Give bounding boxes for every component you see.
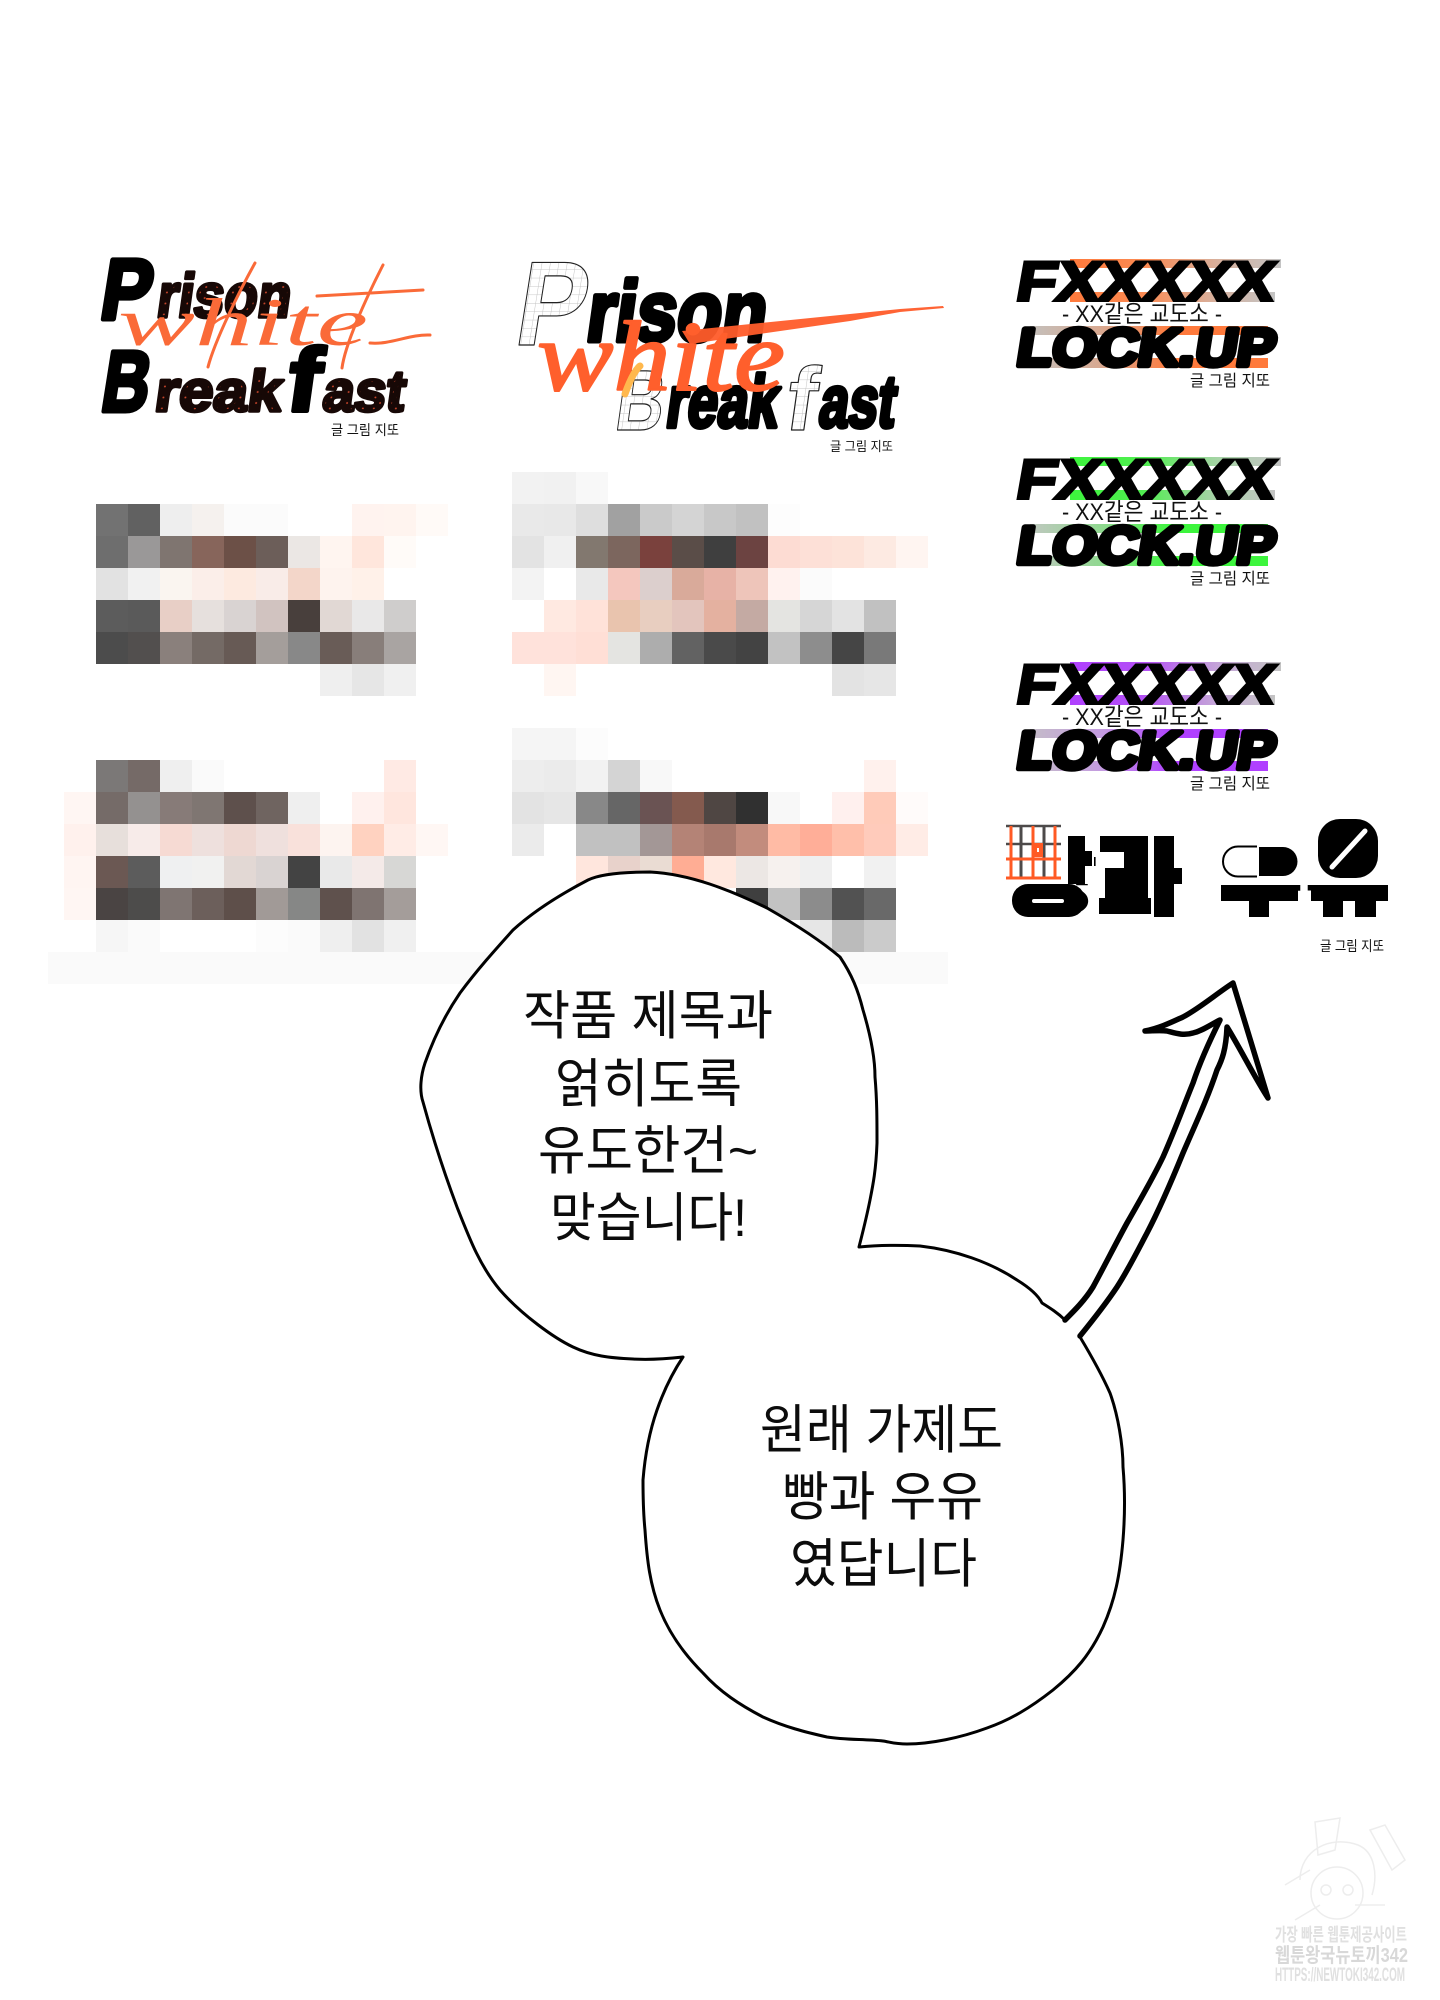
- bubble text: upper balloon: 유도한건~: [538, 1122, 758, 1181]
- logo: FXXXXX LOCK.UP green: LOCK.UP: [1013, 517, 1280, 575]
- logo: FXXXXX LOCK.UP orange: LOCK.UP: [1013, 319, 1280, 377]
- mosaic: faint strip under the logos: [48, 952, 948, 984]
- logo: Prison white Breakfast, version 2: f: [780, 349, 825, 450]
- logo: FXXXXX LOCK.UP orange: 글 그림 지또: [1190, 372, 1270, 390]
- logo: Prison white Breakfast, version 1: ast: [319, 359, 410, 424]
- logo: Prison white Breakfast, version 1: f: [281, 330, 329, 431]
- logo: Prison white Breakfast, version 2: ast: [815, 360, 902, 443]
- mosaic: censored logo lower middle: [512, 728, 928, 952]
- logo: FXXXXX LOCK.UP orange: FXXXXX: [1012, 250, 1281, 312]
- logo: FXXXXX LOCK.UP orange: [1012, 250, 1281, 390]
- logo: Prison white Breakfast, version 2: reak: [662, 360, 786, 443]
- logo: Prison white Breakfast, version 2: rison: [581, 264, 775, 360]
- watermark: site text: [1275, 1925, 1408, 1986]
- logo: Prison white Breakfast, version 2: white: [537, 301, 785, 412]
- bubble text: lower balloon: 빵과 우유: [782, 1468, 983, 1527]
- logo: Prison white Breakfast, version 1: B: [96, 334, 158, 430]
- logo: Prison white Breakfast, version 1: 글 그림 지또: [331, 422, 399, 438]
- watermark: faint character sketch: [1285, 1818, 1405, 1920]
- bubble text: lower balloon: 였답니다: [790, 1535, 977, 1594]
- bubble text: upper balloon: 맞습니다!: [550, 1189, 747, 1248]
- logo: 빵과 우유: 빵과: [1016, 835, 1180, 926]
- bubble text: upper balloon: [523, 987, 773, 1248]
- logo: Prison white Breakfast, version 2: 글 그림 지또: [830, 439, 893, 454]
- icon: prison bars with lock: [1006, 826, 1061, 878]
- logo: FXXXXX LOCK.UP purple: LOCK.UP: [1013, 722, 1280, 780]
- logo: FXXXXX LOCK.UP green: - XX같은 교도소 -: [1062, 499, 1222, 526]
- mosaic: censored logo top middle: [512, 472, 928, 696]
- logo: Prison white Breakfast, version 1: rison: [153, 262, 297, 331]
- icon: tablet: [1318, 819, 1378, 878]
- mosaic: censored logo lower left: [64, 760, 448, 952]
- bubble text: lower balloon: 원래 가제도: [760, 1401, 1003, 1460]
- logo: Prison white Breakfast, version 2: P: [508, 237, 599, 371]
- logo: Prison white Breakfast, version 2: [508, 237, 944, 454]
- logo: Prison white Breakfast, version 1: white: [118, 284, 368, 360]
- logo: FXXXXX LOCK.UP purple: 글 그림 지또: [1190, 775, 1270, 793]
- logo: FXXXXX LOCK.UP green: 글 그림 지또: [1190, 570, 1270, 588]
- logo: FXXXXX LOCK.UP orange: - XX같은 교도소 -: [1062, 301, 1222, 328]
- logo: FXXXXX LOCK.UP purple: - XX같은 교도소 -: [1062, 704, 1222, 731]
- logo: Prison white Breakfast, version 1: P: [95, 242, 160, 338]
- watermark: site text: 웹툰왕국뉴토끼342: [1275, 1944, 1408, 1967]
- mosaic: censored logo top left: [96, 504, 448, 696]
- bubble text: lower balloon: [760, 1401, 1003, 1594]
- logo: Prison white Breakfast, version 1: [95, 242, 430, 438]
- speech bubble: double balloon outline: [421, 872, 1124, 1744]
- logo: 빵과 우유: [1000, 810, 1400, 954]
- logo: Prison white Breakfast, version 1: reak: [151, 359, 288, 424]
- logo: Prison white Breakfast, version 2: B: [610, 353, 672, 449]
- logo: FXXXXX LOCK.UP purple: FXXXXX: [1012, 653, 1281, 715]
- bubble text: upper balloon: 얽히도록: [555, 1055, 742, 1114]
- bubble text: upper balloon: 작품 제목과: [523, 987, 773, 1046]
- icon: capsule: [1223, 846, 1298, 876]
- arrow: pointing up to the 빵과 우유 logo: [1065, 983, 1268, 1336]
- logo: 빵과 우유: 우유: [1221, 835, 1387, 926]
- logo: 빵과 우유: 글 그림 지또: [1320, 938, 1384, 954]
- shapes that redraw the custom letterforms: [1000, 810, 1400, 925]
- logo: FXXXXX LOCK.UP purple: [1012, 653, 1281, 793]
- logo: FXXXXX LOCK.UP green: FXXXXX: [1012, 448, 1281, 510]
- logo: FXXXXX LOCK.UP green: [1012, 448, 1281, 588]
